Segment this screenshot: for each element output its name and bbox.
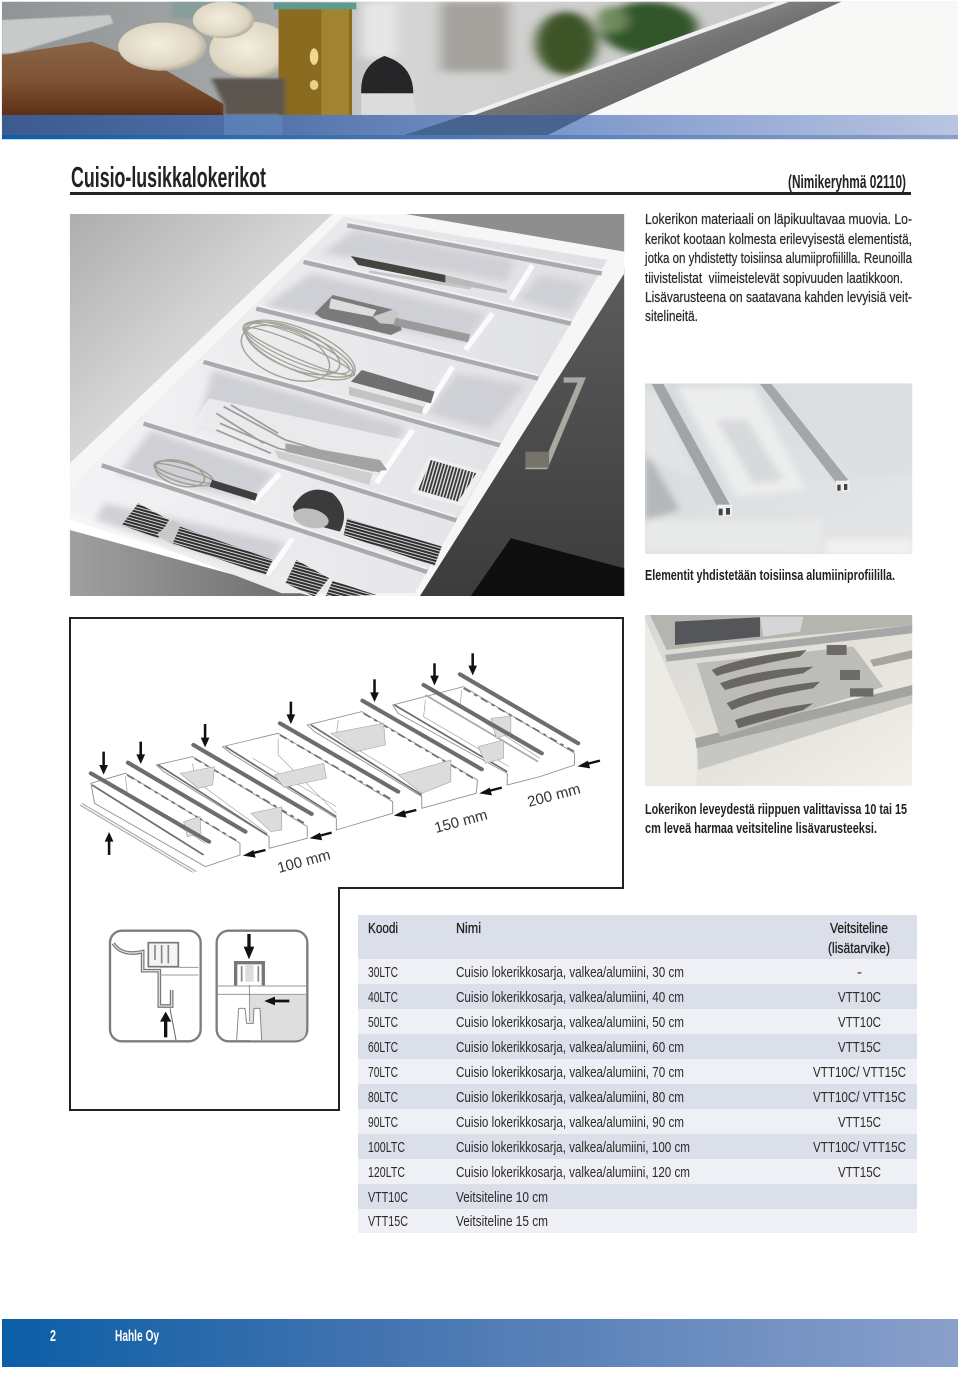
caption: knife holder accessory: cm leveä harmaa veitsiteline lisävarusteeksi.	[645, 820, 877, 837]
detail diagram: profile mounting	[110, 931, 307, 1041]
row 30LTC: Cuisio lokerikkosarja, valkea/alumiini, 30 cm	[456, 964, 684, 981]
row 70LTC: 70LTC	[368, 1064, 398, 1081]
footer bar: 2	[50, 1328, 56, 1345]
row 100LTC: VTT10C/ VTT15C	[813, 1139, 906, 1156]
trays	[91, 687, 574, 867]
photo: cutlery drawer	[70, 214, 624, 597]
row 60LTC: VTT15C	[838, 1039, 881, 1056]
spoons	[293, 490, 344, 532]
photo: aluminium profile joints	[645, 383, 912, 554]
header photo banner	[2, 2, 958, 139]
row 60LTC: Cuisio lokerikkosarja, valkea/alumiini, 60 cm	[456, 1039, 684, 1056]
row 30LTC: -	[857, 964, 862, 981]
row 90LTC: VTT15C	[838, 1114, 881, 1131]
row 40LTC: Cuisio lokerikkosarja, valkea/alumiini, 40 cm	[456, 989, 684, 1006]
row 80LTC: Cuisio lokerikkosarja, valkea/alumiini, 80 cm	[456, 1089, 684, 1106]
rails	[91, 674, 578, 842]
bottom strip	[80, 803, 196, 872]
row 90LTC	[358, 1109, 917, 1134]
forks bottom	[122, 503, 169, 538]
photo: knife holder accessory	[645, 615, 912, 786]
row 50LTC: Cuisio lokerikkosarja, valkea/alumiini, 50 cm	[456, 1014, 684, 1031]
dimension label: 150 mm: 150 mm	[433, 806, 489, 837]
arrows	[104, 653, 600, 855]
dimension label: 100 mm: 100 mm	[276, 846, 332, 877]
row 100LTC	[358, 1134, 917, 1159]
title: Cuisio-lusikkalokerikot	[71, 162, 266, 194]
left detail	[110, 931, 201, 1041]
row 40LTC	[358, 984, 917, 1009]
footer bar: Hahle Oy	[115, 1328, 159, 1345]
small whisk	[153, 459, 214, 488]
text block: description: Lokerikon materiaali on läpikuultavaa muovia. Lo-	[645, 212, 912, 228]
row 100LTC: Cuisio lokerikkosarja, valkea/alumiini, 100 cm	[456, 1139, 690, 1156]
row 100LTC: 100LTC	[368, 1139, 405, 1156]
row 120LTC: VTT15C	[838, 1164, 881, 1181]
table header: Veitsiteline	[830, 920, 888, 937]
row 90LTC: Cuisio lokerikkosarja, valkea/alumiini, 90 cm	[456, 1114, 684, 1131]
row VTT10C: Veitsiteline 10 cm	[456, 1189, 548, 1206]
large whisk	[240, 320, 356, 382]
tray dividers	[180, 716, 511, 837]
row 50LTC: 50LTC	[368, 1014, 398, 1031]
wall background	[70, 214, 336, 467]
table header: Koodi	[368, 920, 398, 937]
grater	[315, 295, 402, 335]
footer bar	[2, 1319, 958, 1367]
text block: description: sitelineitä.	[645, 309, 698, 325]
product table	[358, 915, 917, 1233]
dimension label: 200 mm: 200 mm	[526, 780, 582, 811]
row 50LTC	[358, 1009, 917, 1034]
row 80LTC: 80LTC	[368, 1089, 398, 1106]
row 60LTC: 60LTC	[368, 1039, 398, 1056]
tray inner lines	[125, 690, 540, 843]
row 30LTC: 30LTC	[368, 964, 398, 981]
row VTT10C	[358, 1184, 917, 1209]
text block: description: tiivistelistat viimeistelevät sopivuuden laatikkoon.	[645, 271, 903, 287]
row VTT15C: VTT15C	[368, 1213, 408, 1230]
row 120LTC: 120LTC	[368, 1164, 405, 1181]
row 70LTC: VTT10C/ VTT15C	[813, 1064, 906, 1081]
forks	[216, 405, 380, 472]
row 80LTC	[358, 1084, 917, 1109]
row 80LTC: VTT10C/ VTT15C	[813, 1089, 906, 1106]
row 30LTC	[358, 959, 917, 984]
row 120LTC: Cuisio lokerikkosarja, valkea/alumiini, 120 cm	[456, 1164, 690, 1181]
knife	[351, 256, 445, 283]
drawer handle	[525, 380, 582, 468]
utensil box	[411, 456, 484, 507]
row VTT15C	[358, 1209, 917, 1233]
diagram frame	[70, 618, 623, 1110]
text block: description: Lisävarusteena on saatavana kahden levyisiä veit-	[645, 290, 912, 306]
row 70LTC: Cuisio lokerikkosarja, valkea/alumiini, 70 cm	[456, 1064, 684, 1081]
right detail	[217, 931, 307, 1041]
row VTT10C: VTT10C	[368, 1189, 408, 1206]
row 70LTC	[358, 1059, 917, 1084]
assembly diagram: drawer trays	[80, 653, 600, 872]
row 40LTC: VTT10C	[838, 989, 881, 1006]
row 90LTC: 90LTC	[368, 1114, 398, 1131]
text block: description	[644, 212, 913, 325]
compartment shading	[96, 230, 587, 573]
table header: (lisätarvike)	[828, 940, 890, 957]
row 120LTC	[358, 1159, 917, 1184]
rails	[102, 225, 602, 572]
row 40LTC: 40LTC	[368, 989, 398, 1006]
caption: knife holder accessory	[645, 801, 907, 837]
row 50LTC: VTT10C	[838, 1014, 881, 1031]
table header	[358, 915, 917, 959]
tray notched edges	[92, 688, 574, 855]
table header: Nimi	[456, 920, 481, 937]
row VTT15C: Veitsiteline 15 cm	[456, 1213, 548, 1230]
row 60LTC	[358, 1034, 917, 1059]
